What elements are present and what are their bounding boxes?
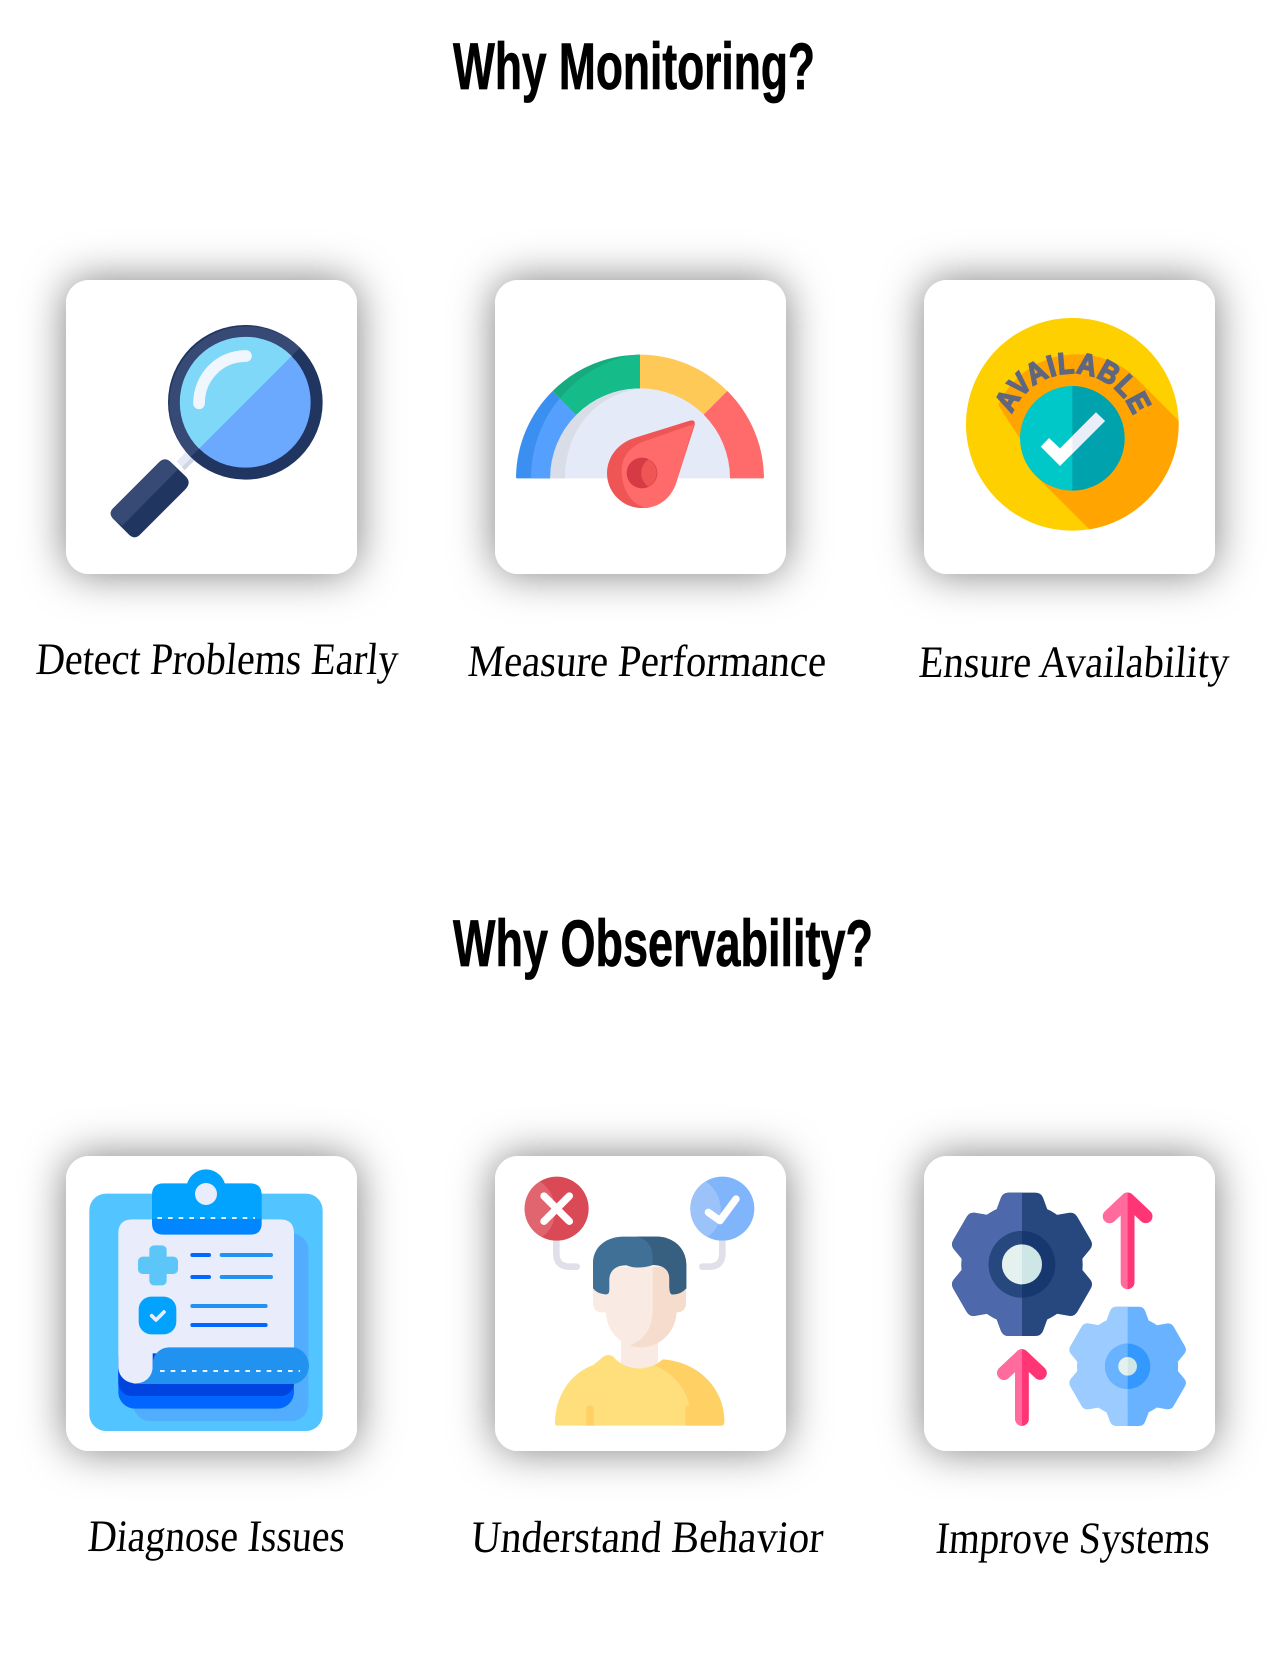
title: Why Observability?: Why Observability? — [453, 906, 873, 980]
panel: Measure Performance — [466, 280, 828, 686]
card — [495, 1156, 786, 1451]
caption: Improve Systems — [934, 1513, 1212, 1563]
panel: Improve Systems — [924, 1156, 1215, 1563]
card — [924, 1156, 1215, 1451]
panel: Understand Behavior — [469, 1156, 825, 1562]
icon: available badge — [966, 318, 1179, 531]
panel: Detect Problems Early — [34, 280, 401, 684]
card — [66, 280, 357, 574]
title: Why Monitoring?: Why Monitoring? — [453, 29, 815, 103]
panel: Ensure Availability — [894, 250, 1246, 687]
caption: Measure Performance — [466, 636, 828, 686]
card — [66, 1156, 357, 1451]
caption: Ensure Availability — [917, 637, 1232, 687]
panel: Diagnose Issues — [66, 1156, 357, 1561]
caption: Detect Problems Early — [34, 634, 401, 684]
icon: person deciding — [525, 1177, 754, 1426]
icon: magnifying glass — [111, 325, 323, 537]
caption: Understand Behavior — [469, 1512, 825, 1562]
card — [495, 280, 786, 574]
card — [924, 280, 1215, 574]
icon: speedometer gauge — [516, 355, 764, 508]
icon: medical clipboard — [89, 1169, 323, 1431]
icon: gears with up arrows — [947, 1193, 1190, 1426]
caption: Diagnose Issues — [86, 1511, 347, 1561]
icon: available badge: AVAILABLE — [996, 352, 1152, 416]
